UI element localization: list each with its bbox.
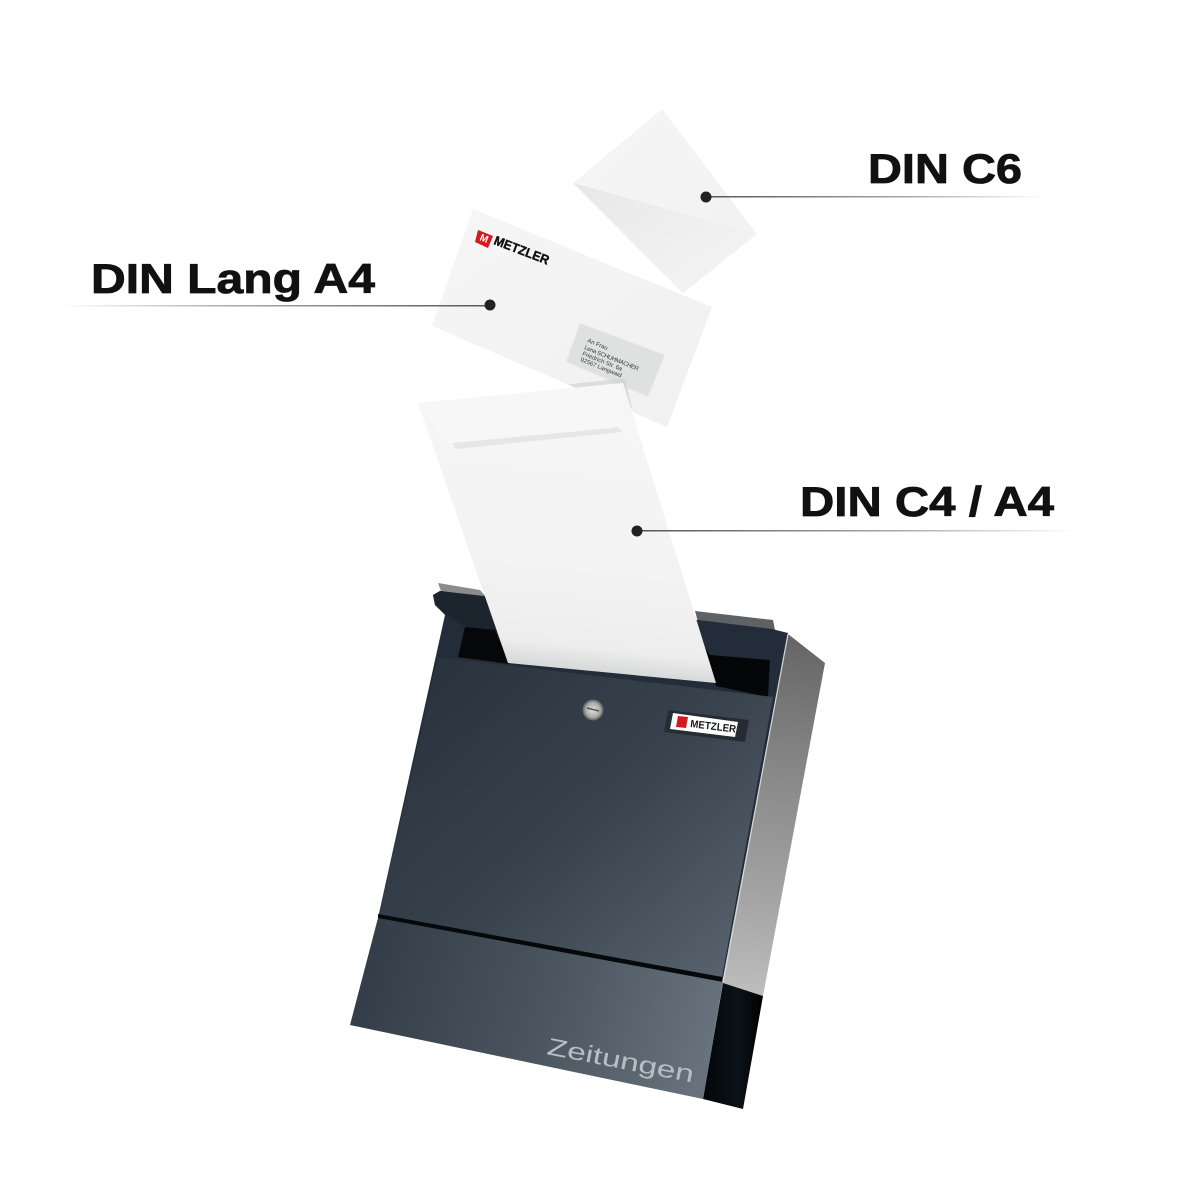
side panel: stainless steel — [722, 634, 825, 996]
side panel: black lower section — [703, 983, 763, 1109]
slot opening right — [700, 640, 770, 697]
nameplate — [664, 710, 749, 742]
label: DIN C6: DIN C6 — [868, 145, 1022, 192]
steel rail right — [695, 611, 775, 630]
address text: Lena SCHUHMACHER — [583, 345, 640, 373]
address text: 92567 Langwaid — [579, 357, 622, 379]
envelope: DIN C6 — [573, 109, 757, 293]
label: DIN C4 / A4 — [632, 478, 1077, 536]
door panel — [379, 657, 773, 977]
address text: An Frau — [586, 338, 608, 352]
address text — [579, 338, 640, 379]
Zeitungen lettering: Zeitungen — [545, 1033, 696, 1088]
label: DIN Lang A4: DIN Lang A4 — [91, 255, 376, 302]
label: DIN Lang A4 — [60, 255, 496, 310]
steel rail left — [438, 583, 489, 600]
label: DIN C6 — [700, 145, 1046, 202]
envelope flap — [418, 383, 623, 443]
mailbox — [350, 583, 825, 1109]
slot opening left — [458, 627, 510, 664]
flap shadow — [452, 427, 622, 449]
label: DIN C4 / A4: DIN C4 / A4 — [800, 478, 1055, 525]
envelope: DIN C4 — [418, 383, 716, 683]
nameplate: METZLER — [690, 718, 737, 736]
METZLER logo: M — [478, 233, 490, 246]
address window — [566, 323, 665, 397]
door gap — [378, 914, 722, 983]
mailbox frame — [378, 591, 788, 983]
frame top band — [433, 591, 497, 632]
lower newspaper panel — [350, 918, 723, 1099]
shadow on DIN Lang envelope — [568, 378, 632, 408]
METZLER logo: METZLER — [492, 233, 552, 268]
METZLER logo — [475, 230, 552, 268]
lock — [582, 700, 604, 720]
envelope: DIN Lang — [432, 209, 712, 427]
steel edge highlight — [723, 634, 788, 983]
address text: Friedrich Str. 6a — [581, 351, 623, 373]
